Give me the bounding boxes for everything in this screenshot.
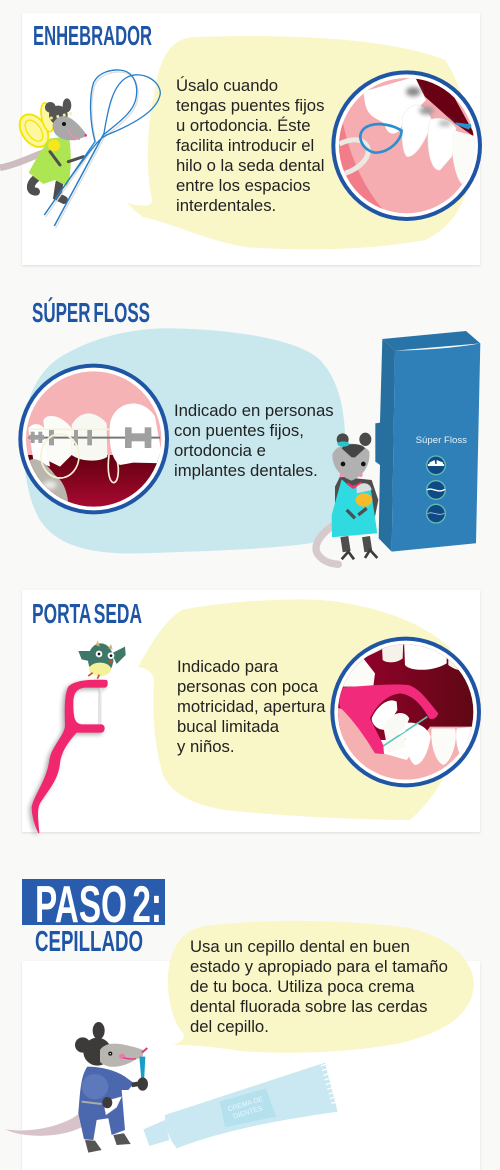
text: super floss: ortodoncia e bbox=[174, 441, 266, 460]
tube label: CREMA DE bbox=[227, 1096, 264, 1113]
speech bubble: super floss bbox=[23, 328, 345, 554]
text: enhebrador: facilita introducir el bbox=[176, 136, 314, 155]
text: cepillado: dental fluorada sobre las cerdas bbox=[190, 997, 427, 1016]
panel: super floss bbox=[18, 328, 480, 564]
box label: Súper Floss bbox=[416, 435, 468, 445]
illustration: opossum brushing bbox=[5, 1022, 148, 1153]
text: enhebrador: u ortodoncia. Éste bbox=[176, 116, 311, 135]
heading: cepillado: CEPILLADO bbox=[35, 926, 143, 958]
icon: pink floss pick bbox=[29, 680, 108, 835]
text: porta seda: y niños. bbox=[177, 737, 235, 756]
text: enhebrador: tengas puentes fijos bbox=[176, 96, 324, 115]
illustration: circle threader between teeth bbox=[331, 70, 482, 221]
heading block: paso 2 bbox=[22, 876, 165, 934]
text: cepillado: Usa un cepillo dental en buen bbox=[190, 937, 410, 956]
panel: enhebrador bbox=[0, 13, 482, 266]
text: porta seda: bucal limitada bbox=[177, 717, 280, 736]
heading: enhebrador: ENHEBRADOR bbox=[33, 20, 152, 51]
tube label: DIENTES bbox=[233, 1105, 264, 1121]
text: super floss: implantes dentales. bbox=[174, 461, 318, 480]
illustration: toothpaste tube bbox=[143, 1063, 338, 1148]
icon: floss threader loops bbox=[44, 70, 160, 228]
illustration: circle braces and floss bbox=[18, 364, 169, 514]
speech bubble: cepillado bbox=[168, 921, 474, 1053]
text: enhebrador: Úsalo cuando bbox=[176, 76, 278, 95]
illustration: super floss box bbox=[375, 331, 480, 552]
text: porta seda: motricidad, apertura bbox=[177, 697, 326, 716]
text: super floss: Indicado en personas bbox=[174, 401, 334, 420]
illustration: fairy opossum bbox=[0, 98, 87, 200]
box icons bbox=[427, 456, 445, 523]
text: super floss: con puentes fijos, bbox=[174, 421, 304, 440]
panel: porta seda bbox=[22, 590, 481, 835]
text: porta seda: Indicado para bbox=[177, 657, 279, 676]
heading: porta seda: PORTA SEDA bbox=[32, 598, 142, 629]
text: enhebrador: entre los espacios bbox=[176, 176, 311, 195]
text: cepillado: estado y apropiado para el tamaño bbox=[190, 957, 448, 976]
speech bubble: enhebrador bbox=[127, 36, 472, 249]
heading: super floss: SÚPER FLOSS bbox=[32, 297, 150, 328]
illustration: circle floss pick on teeth bbox=[330, 637, 481, 787]
text: cepillado: del cepillo. bbox=[190, 1017, 269, 1036]
text: porta seda: personas con poca bbox=[177, 677, 319, 696]
text: enhebrador: interdentales. bbox=[176, 196, 276, 215]
text: cepillado: de tu boca. Utiliza poca crema bbox=[190, 977, 415, 996]
heading block: paso 2: PASO 2: bbox=[35, 876, 162, 934]
text: enhebrador: hilo o la seda dental bbox=[176, 156, 324, 175]
speech bubble: porta seda bbox=[138, 599, 462, 820]
panel: paso 2 cepillado bbox=[5, 876, 480, 1170]
illustration: owl bbox=[78, 641, 126, 679]
illustration: opossum with turquoise dress bbox=[316, 433, 378, 564]
